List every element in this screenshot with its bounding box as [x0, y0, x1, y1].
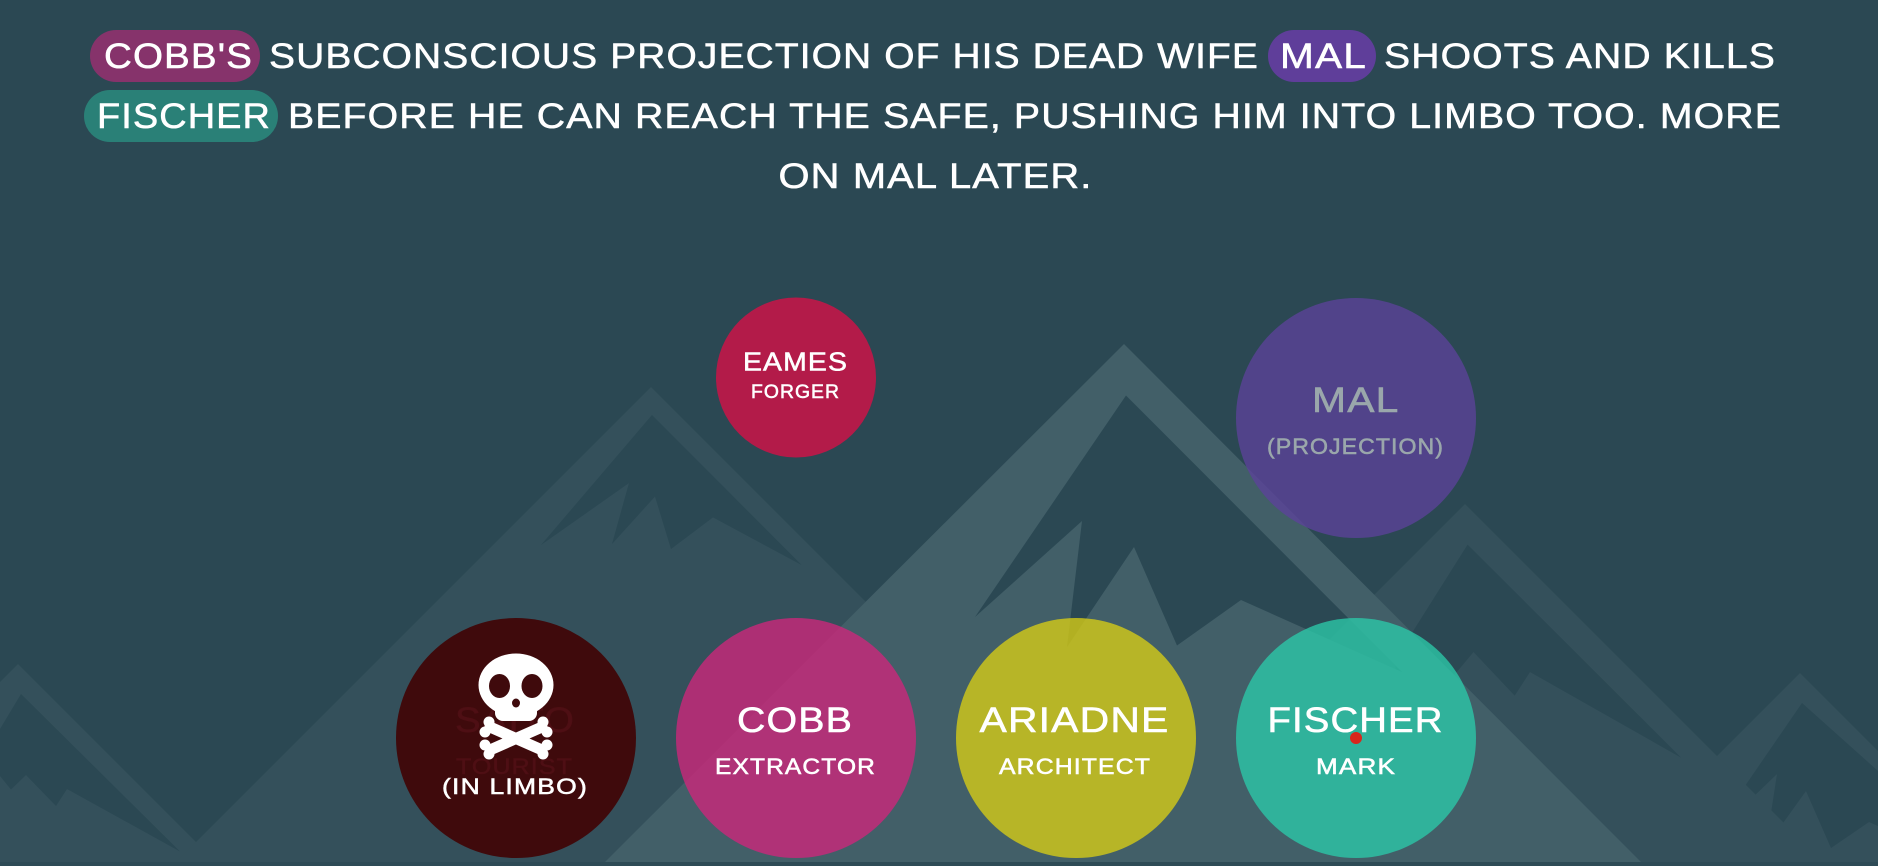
ground strip	[0, 862, 1878, 866]
character: Ariadne: ARIADNE	[980, 701, 1170, 740]
character: Fischer	[1236, 618, 1476, 858]
character: Fischer: FISCHER	[1268, 701, 1444, 740]
character: Fischer: MARK	[1316, 754, 1396, 779]
character: Mal projection: (PROJECTION)	[1267, 434, 1444, 459]
headline line 3: ON MAL LATER.	[778, 157, 1092, 196]
mountain: front centre	[605, 344, 1641, 862]
name pill: Cobb's: COBB'S	[104, 37, 253, 76]
name pill: Mal	[1268, 30, 1376, 82]
marker: red dot	[1350, 732, 1362, 744]
headline line 2: BEFORE HE CAN REACH THE SAFE, PUSHING HIM INTO LIMBO TOO. MORE	[288, 97, 1782, 136]
headline text	[84, 30, 1782, 196]
icon: skull and crossbones	[478, 654, 554, 760]
character: Ariadne	[956, 618, 1196, 858]
name pill: Fischer: FISCHER	[97, 97, 271, 136]
mountain: far right	[1611, 673, 1878, 862]
character: Eames: FORGER	[751, 382, 840, 403]
character: Mal projection	[1236, 298, 1476, 538]
character: Cobb: COBB	[737, 701, 853, 740]
character: Cobb	[676, 618, 916, 858]
name pill: Fischer	[84, 90, 278, 142]
character: Saito in limbo: (IN LIMBO)	[442, 774, 588, 799]
character: Cobb: EXTRACTOR	[715, 754, 876, 779]
background mountains	[0, 344, 1878, 866]
character: Saito in limbo: SAITO	[455, 701, 575, 740]
headline line 1 part 1: SUBCONSCIOUS PROJECTION OF HIS DEAD WIFE	[269, 37, 1259, 76]
character: Ariadne: ARCHITECT	[999, 754, 1151, 779]
character: Saito in limbo	[396, 618, 636, 858]
character: Eames	[716, 298, 876, 458]
mountain: right	[1107, 504, 1823, 862]
character: Saito in limbo: TOURIST	[456, 754, 573, 779]
mountain: far left	[0, 664, 216, 862]
mountain: centre left	[176, 387, 1126, 862]
headline line 1 part 2: SHOOTS AND KILLS	[1384, 37, 1776, 76]
name pill: Cobb's	[90, 30, 260, 82]
character: Eames: EAMES	[743, 346, 848, 376]
character: Mal projection: MAL	[1312, 381, 1400, 420]
name pill: Mal: MAL	[1280, 37, 1367, 76]
